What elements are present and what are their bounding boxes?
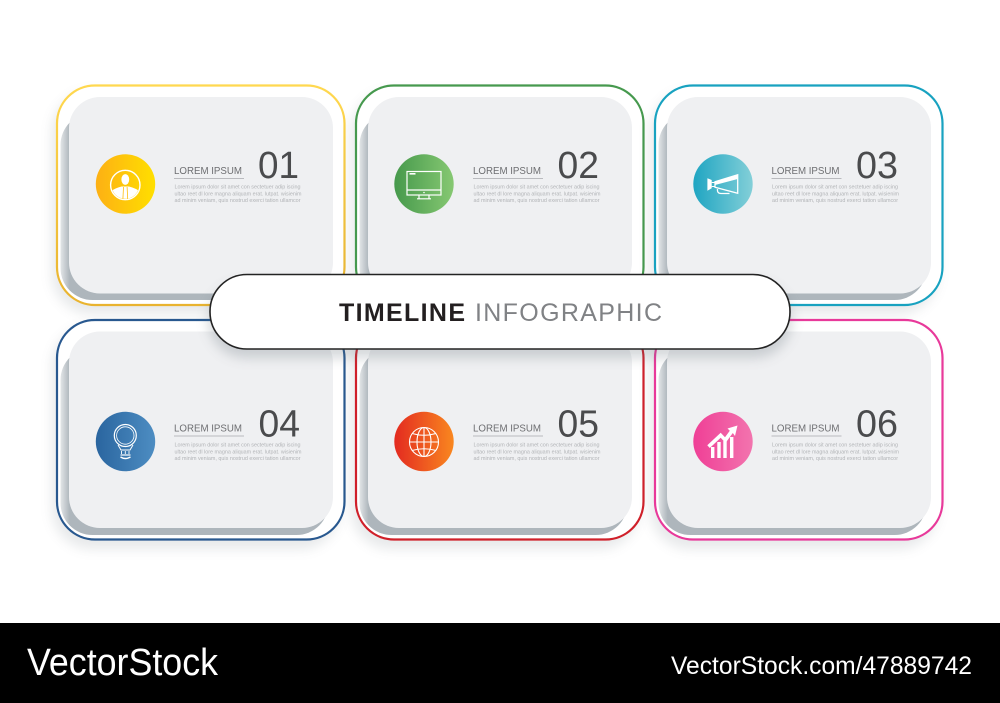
heading: step 01 label: LOREM IPSUM [174, 166, 242, 177]
text block: step 01: ad minim veniam, quis nostrud exerci tation ullamcor [174, 198, 301, 204]
number: 03: 03 [856, 145, 898, 187]
text block: step 02: ultao reet dl lore magna aliquam erat. lutpat. wisienim [474, 191, 600, 197]
text block: step 03: ultao reet dl lore magna aliquam erat. lutpat. wisienim [772, 191, 899, 197]
text block: step 06: ultao reet dl lore magna aliquam erat. lutpat. wisienim [772, 449, 899, 455]
text block: step 01: Lorem ipsum dolor sit amet con sectetuer adip iscing [174, 184, 301, 190]
heading: step 04 label: LOREM IPSUM [174, 424, 242, 434]
text block: step 04 [174, 442, 302, 462]
icon: monitor [394, 154, 454, 214]
heading: step 02 label: LOREM IPSUM [473, 166, 541, 177]
panel: step 04 [52, 320, 344, 549]
text block: step 05: ad minim veniam, quis nostrud exerci tation ullamcor [474, 456, 600, 462]
number: 05: 05 [558, 404, 599, 446]
title: infographic: INFOGRAPHIC [475, 299, 662, 327]
text block: step 02: Lorem ipsum dolor sit amet con sectetuer adip iscing [474, 184, 600, 190]
footer bar [0, 623, 1000, 703]
panel: step 03 [650, 86, 942, 314]
heading: step 05 label: LOREM IPSUM [473, 424, 541, 434]
panel: step 01 [52, 86, 344, 314]
icon: businessman [96, 154, 155, 214]
title: timeline: TIMELINE [339, 299, 465, 327]
text block: step 06: Lorem ipsum dolor sit amet con sectetuer adip iscing [772, 442, 898, 448]
text block: step 04: Lorem ipsum dolor sit amet con sectetuer adip iscing [174, 442, 301, 448]
heading: step 06 label: LOREM IPSUM [772, 424, 840, 434]
number: 01: 01 [258, 145, 299, 187]
number: 04: 04 [258, 404, 300, 446]
title banner [208, 274, 792, 358]
text block: step 03 [772, 184, 899, 204]
text block: step 03: Lorem ipsum dolor sit amet con sectetuer adip iscing [772, 184, 898, 190]
panel: step 02 [351, 86, 644, 314]
heading: step 03 label: LOREM IPSUM [772, 166, 840, 177]
icon: megaphone [693, 154, 753, 214]
icon: globe [394, 412, 454, 471]
text block: step 05: Lorem ipsum dolor sit amet con sectetuer adip iscing [474, 442, 600, 448]
number: 02: 02 [558, 145, 599, 187]
text block: step 01: ultao reet dl lore magna aliquam erat. lutpat. wisienim [174, 191, 302, 197]
icon: light bulb [96, 412, 155, 471]
text block: step 04: ultao reet dl lore magna aliquam erat. lutpat. wisienim [174, 449, 302, 455]
text block: step 06: ad minim veniam, quis nostrud exerci tation ullamcor [772, 456, 898, 462]
text block: step 05: ultao reet dl lore magna aliquam erat. lutpat. wisienim [474, 449, 600, 455]
panel: step 05 [351, 320, 644, 549]
text block: step 05 [474, 442, 600, 462]
icon: growth chart [693, 412, 753, 471]
text block: step 06 [772, 442, 899, 462]
text block: step 04: ad minim veniam, quis nostrud exerci tation ullamcor [174, 456, 301, 462]
text block: step 01 [174, 184, 302, 204]
footer brand: VectorStock [27, 642, 219, 684]
number: 06: 06 [856, 404, 898, 446]
text block: step 02 [474, 184, 600, 204]
text block: step 03: ad minim veniam, quis nostrud exerci tation ullamcor [772, 198, 898, 204]
panel: step 06 [650, 320, 942, 549]
text block: step 02: ad minim veniam, quis nostrud exerci tation ullamcor [474, 198, 600, 204]
footer url: VectorStock.com/47889742 [671, 652, 972, 680]
